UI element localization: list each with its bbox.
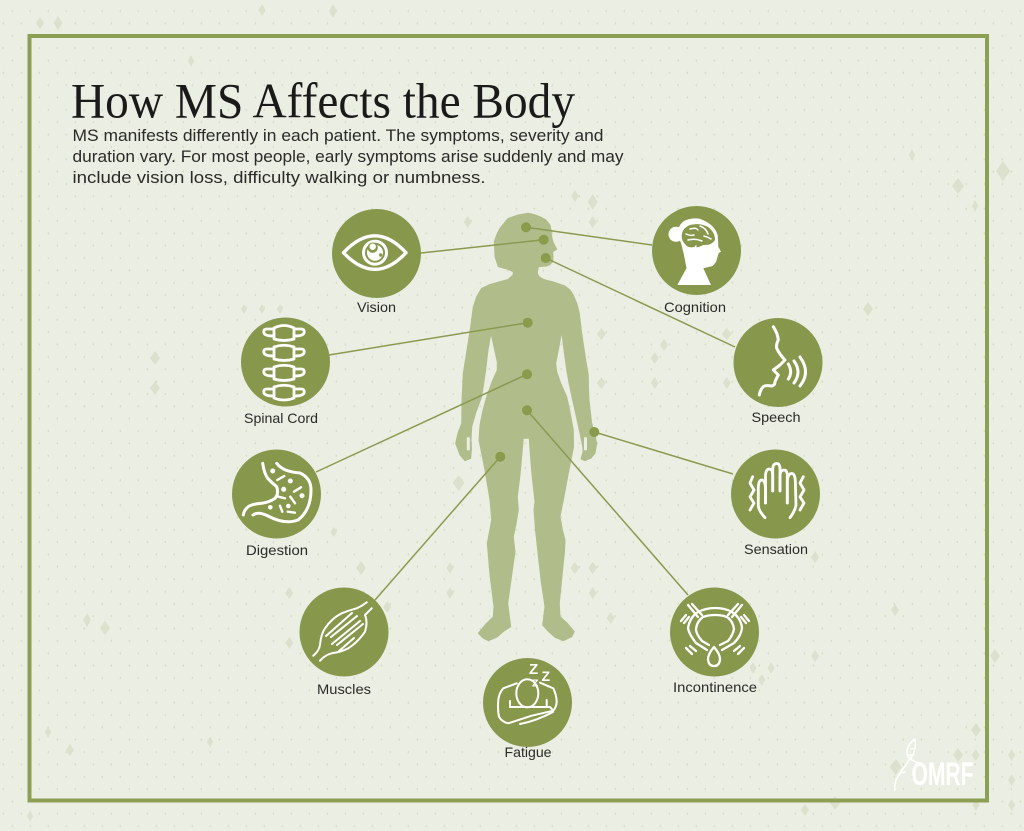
icon: bladder — [681, 604, 749, 666]
body location dots — [495, 222, 599, 462]
symptom: speech — [734, 318, 822, 425]
symptom: cognition — [652, 206, 741, 315]
icon: speaking face — [759, 327, 806, 395]
label: muscles: Muscles — [317, 681, 371, 697]
icon: stomach — [243, 463, 311, 522]
icon: sleep letters: Z — [529, 661, 538, 678]
icon: muscle — [313, 602, 372, 661]
label: vision: Vision — [357, 299, 396, 315]
label: speech: Speech — [752, 409, 800, 425]
icon: spine — [264, 326, 304, 400]
symptom: incontinence — [670, 588, 759, 695]
intro text — [72, 126, 624, 187]
icon: sleep letters: Z — [542, 668, 550, 684]
title: How MS Affects the Body — [71, 72, 575, 128]
symptom: sensation — [731, 450, 820, 557]
icon: hand with tingling — [750, 464, 804, 518]
intro text: MS manifests differently in each patient. The symptoms, severity and — [72, 126, 604, 145]
symptom: vision — [332, 209, 421, 315]
label: incontinence: Incontinence — [673, 679, 757, 695]
body silhouette — [456, 213, 597, 641]
label: spinal cord: Spinal Cord — [244, 410, 318, 426]
label: digestion: Digestion — [246, 542, 308, 558]
connector lines — [316, 227, 735, 600]
intro text: include vision loss, difficulty walking or numbness. — [72, 168, 485, 187]
symptom: muscles — [300, 588, 388, 697]
label: sensation: Sensation — [744, 541, 808, 557]
logo: OMRF — [895, 739, 974, 792]
symptom: spinal cord — [241, 318, 330, 426]
symptom: fatigue — [483, 658, 572, 760]
symptom: digestion — [232, 450, 321, 558]
icon: head with brain — [668, 218, 721, 285]
icon: sleeping person — [498, 661, 557, 724]
icon: sleep letters — [529, 661, 550, 690]
intro text: duration vary. For most people, early symptoms arise suddenly and may — [72, 147, 624, 166]
icon: eye — [344, 236, 406, 269]
label: cognition: Cognition — [664, 299, 726, 315]
label: fatigue: Fatigue — [504, 744, 552, 760]
logo: OMRF: OMRF — [912, 756, 974, 792]
icon: sleep letters: Z — [532, 678, 539, 690]
